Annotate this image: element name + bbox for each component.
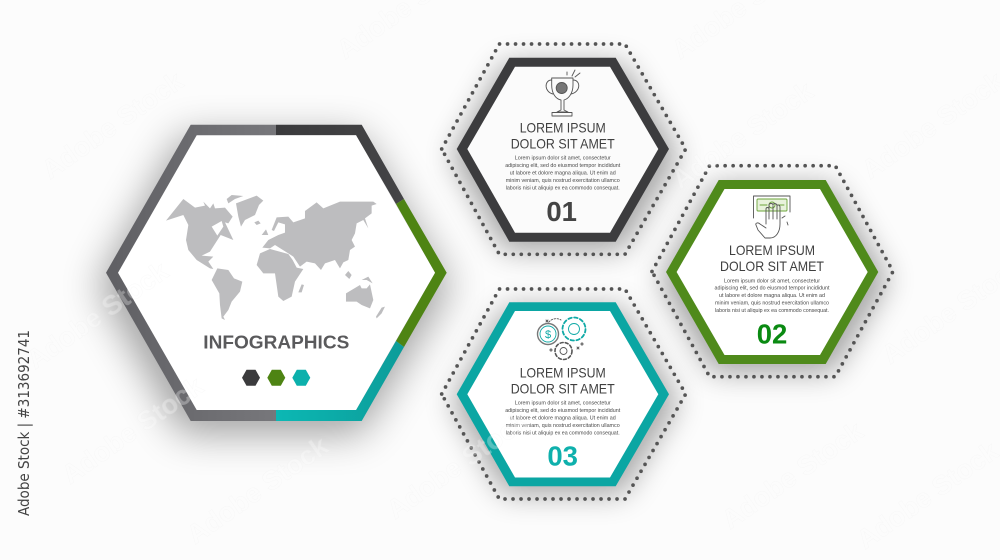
body text [505, 156, 621, 191]
panel: step 03 [442, 289, 686, 499]
body text: adipiscing elit, sed do eiusmod tempor incididunt [714, 286, 830, 292]
watermark: Adobe Stock [36, 65, 189, 185]
number: 03 [547, 440, 578, 471]
frame: green segment [396, 199, 447, 347]
title: LOREM IPSUM [729, 243, 815, 258]
frame: dark segment [276, 125, 404, 204]
body text: adipiscing elit, sed do eiusmod tempor incididunt [505, 163, 621, 169]
world map [166, 195, 385, 320]
icon: trophy [546, 70, 580, 116]
body text: minim veniam, quis nostrud exercitation ullamco [715, 301, 830, 307]
shadows [98, 64, 888, 494]
watermark: Adobe Stock [666, 75, 819, 195]
title [511, 365, 615, 396]
body text [714, 278, 830, 314]
body text: laboris nisi ut aliquip ex ea commodo consequat. [715, 308, 829, 314]
title: DOLOR SIT AMET [720, 259, 824, 274]
dotted outline [442, 289, 686, 499]
frame: grey segment [106, 125, 276, 421]
legend hexagons [242, 370, 310, 386]
body text: Lorem ipsum dolor sit amet, consectetur [724, 278, 820, 284]
title: DOLOR SIT AMET [511, 381, 615, 396]
body text: laboris nisi ut aliquip ex ea commodo consequat. [506, 430, 620, 436]
icon: coin and gears [538, 318, 586, 360]
watermark: Adobe Stock [21, 255, 174, 375]
body text: ut labore et dolore magna aliqua. Ut enim ad [510, 415, 616, 421]
body text: Lorem ipsum dolor sit amet, consectetur [515, 401, 611, 407]
body text: ut labore et dolore magna aliqua. Ut enim ad [719, 293, 825, 299]
panel: step 02 [652, 166, 893, 377]
frame: teal segment [276, 341, 404, 421]
hexagon frame [457, 302, 669, 486]
hexagon interior [677, 189, 868, 355]
icon: coin and gears: $ [545, 329, 551, 341]
watermark: Adobe Stock [851, 435, 1000, 555]
body text: adipiscing elit, sed do eiusmod tempor incididunt [505, 408, 621, 414]
watermark: Adobe Stock [56, 370, 209, 490]
body text: laboris nisi ut aliquip ex ea commodo consequat. [506, 185, 620, 191]
body text: ut labore et dolore magna aliqua. Ut enim ad [510, 170, 616, 176]
watermark: Adobe Stock [181, 430, 334, 550]
title: LOREM IPSUM [520, 365, 606, 380]
title: LOREM IPSUM [520, 120, 606, 135]
body text [505, 401, 621, 436]
title [720, 243, 824, 274]
dotted outline [652, 166, 893, 377]
dotted outline [442, 44, 686, 254]
title: DOLOR SIT AMET [511, 136, 615, 151]
body text: Lorem ipsum dolor sit amet, consectetur [515, 156, 611, 162]
icon: hand on banknote [754, 196, 790, 238]
heading: INFOGRAPHICS [203, 331, 349, 352]
number: 01 [546, 196, 577, 227]
body text: minim veniam, quis nostrud exercitation ullamco [506, 423, 620, 429]
title [511, 120, 615, 151]
stock credit: Adobe Stock | #313692741 [15, 330, 33, 516]
hexagon interior [467, 311, 658, 478]
panel: step 01 [442, 44, 686, 254]
hexagon interior [118, 135, 435, 410]
number: 02 [757, 318, 787, 349]
watermark: Adobe Stock [716, 415, 869, 535]
watermark: Adobe Stock [381, 405, 534, 525]
hexagon frame [666, 180, 878, 364]
hexagon interior [467, 67, 658, 233]
hexagon frame [457, 58, 669, 242]
body text: minim veniam, quis nostrud exercitation ullamco [506, 178, 620, 184]
panel: main hexagon [106, 125, 447, 421]
